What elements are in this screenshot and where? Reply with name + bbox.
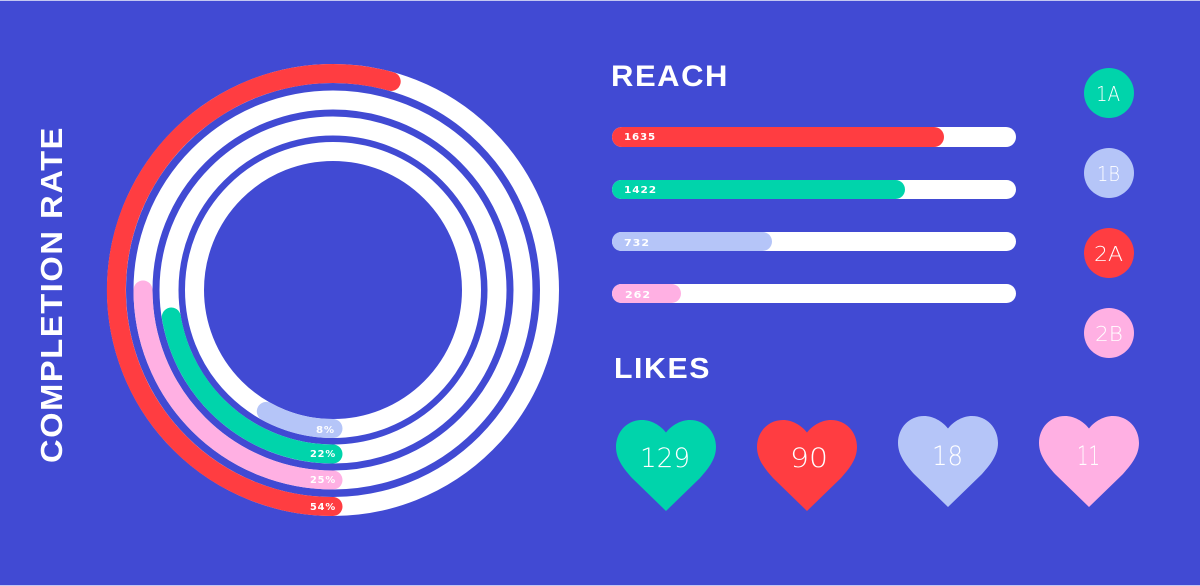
likes hearts xyxy=(616,416,1139,511)
heading: reach: REACH xyxy=(611,60,729,93)
bar: 1635 xyxy=(612,127,1016,147)
bar: 732: 732 xyxy=(624,238,650,249)
bar: 262: 262 xyxy=(625,290,651,301)
ring: 1B 8%: 8% xyxy=(316,425,335,436)
bar: 1422: 1422 xyxy=(624,185,657,196)
heading: completion rate: COMPLETION RATE xyxy=(34,126,69,463)
legend item: 2A: 2A xyxy=(1094,242,1123,266)
heart: 18: 18 xyxy=(932,441,963,472)
ring: 1A 22% xyxy=(169,126,497,460)
bar: 1422 xyxy=(612,180,1016,199)
ring: 2A 54%: 54% xyxy=(310,502,336,513)
ring: 2A 54% xyxy=(116,74,550,513)
ring: 2B 25%: 25% xyxy=(310,475,336,486)
ring: 1A 22%: 22% xyxy=(310,449,336,460)
heart: 90 xyxy=(757,420,857,511)
heading: likes: LIKES xyxy=(614,353,711,385)
heart: 90: 90 xyxy=(790,443,828,474)
heart: 11 xyxy=(1039,416,1139,507)
bar: 732 xyxy=(612,232,1016,251)
heart: 11: 11 xyxy=(1077,441,1100,472)
ring: 2B 25% xyxy=(143,100,523,486)
legend item: 1A xyxy=(1084,68,1134,118)
legend item: 1B: 1B xyxy=(1097,162,1120,186)
heart: 18 xyxy=(898,416,998,507)
bar: 262 xyxy=(612,284,1016,303)
bar chart: reach xyxy=(612,127,1016,303)
bar: 1635: 1635 xyxy=(624,132,656,143)
legend item: 1B xyxy=(1084,148,1134,198)
legend item: 1A: 1A xyxy=(1096,82,1120,106)
legend item: 2A xyxy=(1084,228,1134,278)
heart: 129: 129 xyxy=(640,443,690,474)
legend xyxy=(1084,68,1134,358)
radial chart: completion rate xyxy=(116,74,550,513)
heart: 129 xyxy=(616,420,716,511)
legend item: 2B xyxy=(1084,308,1134,358)
ring: 1B 8% xyxy=(194,152,472,436)
legend item: 2B: 2B xyxy=(1095,322,1123,346)
